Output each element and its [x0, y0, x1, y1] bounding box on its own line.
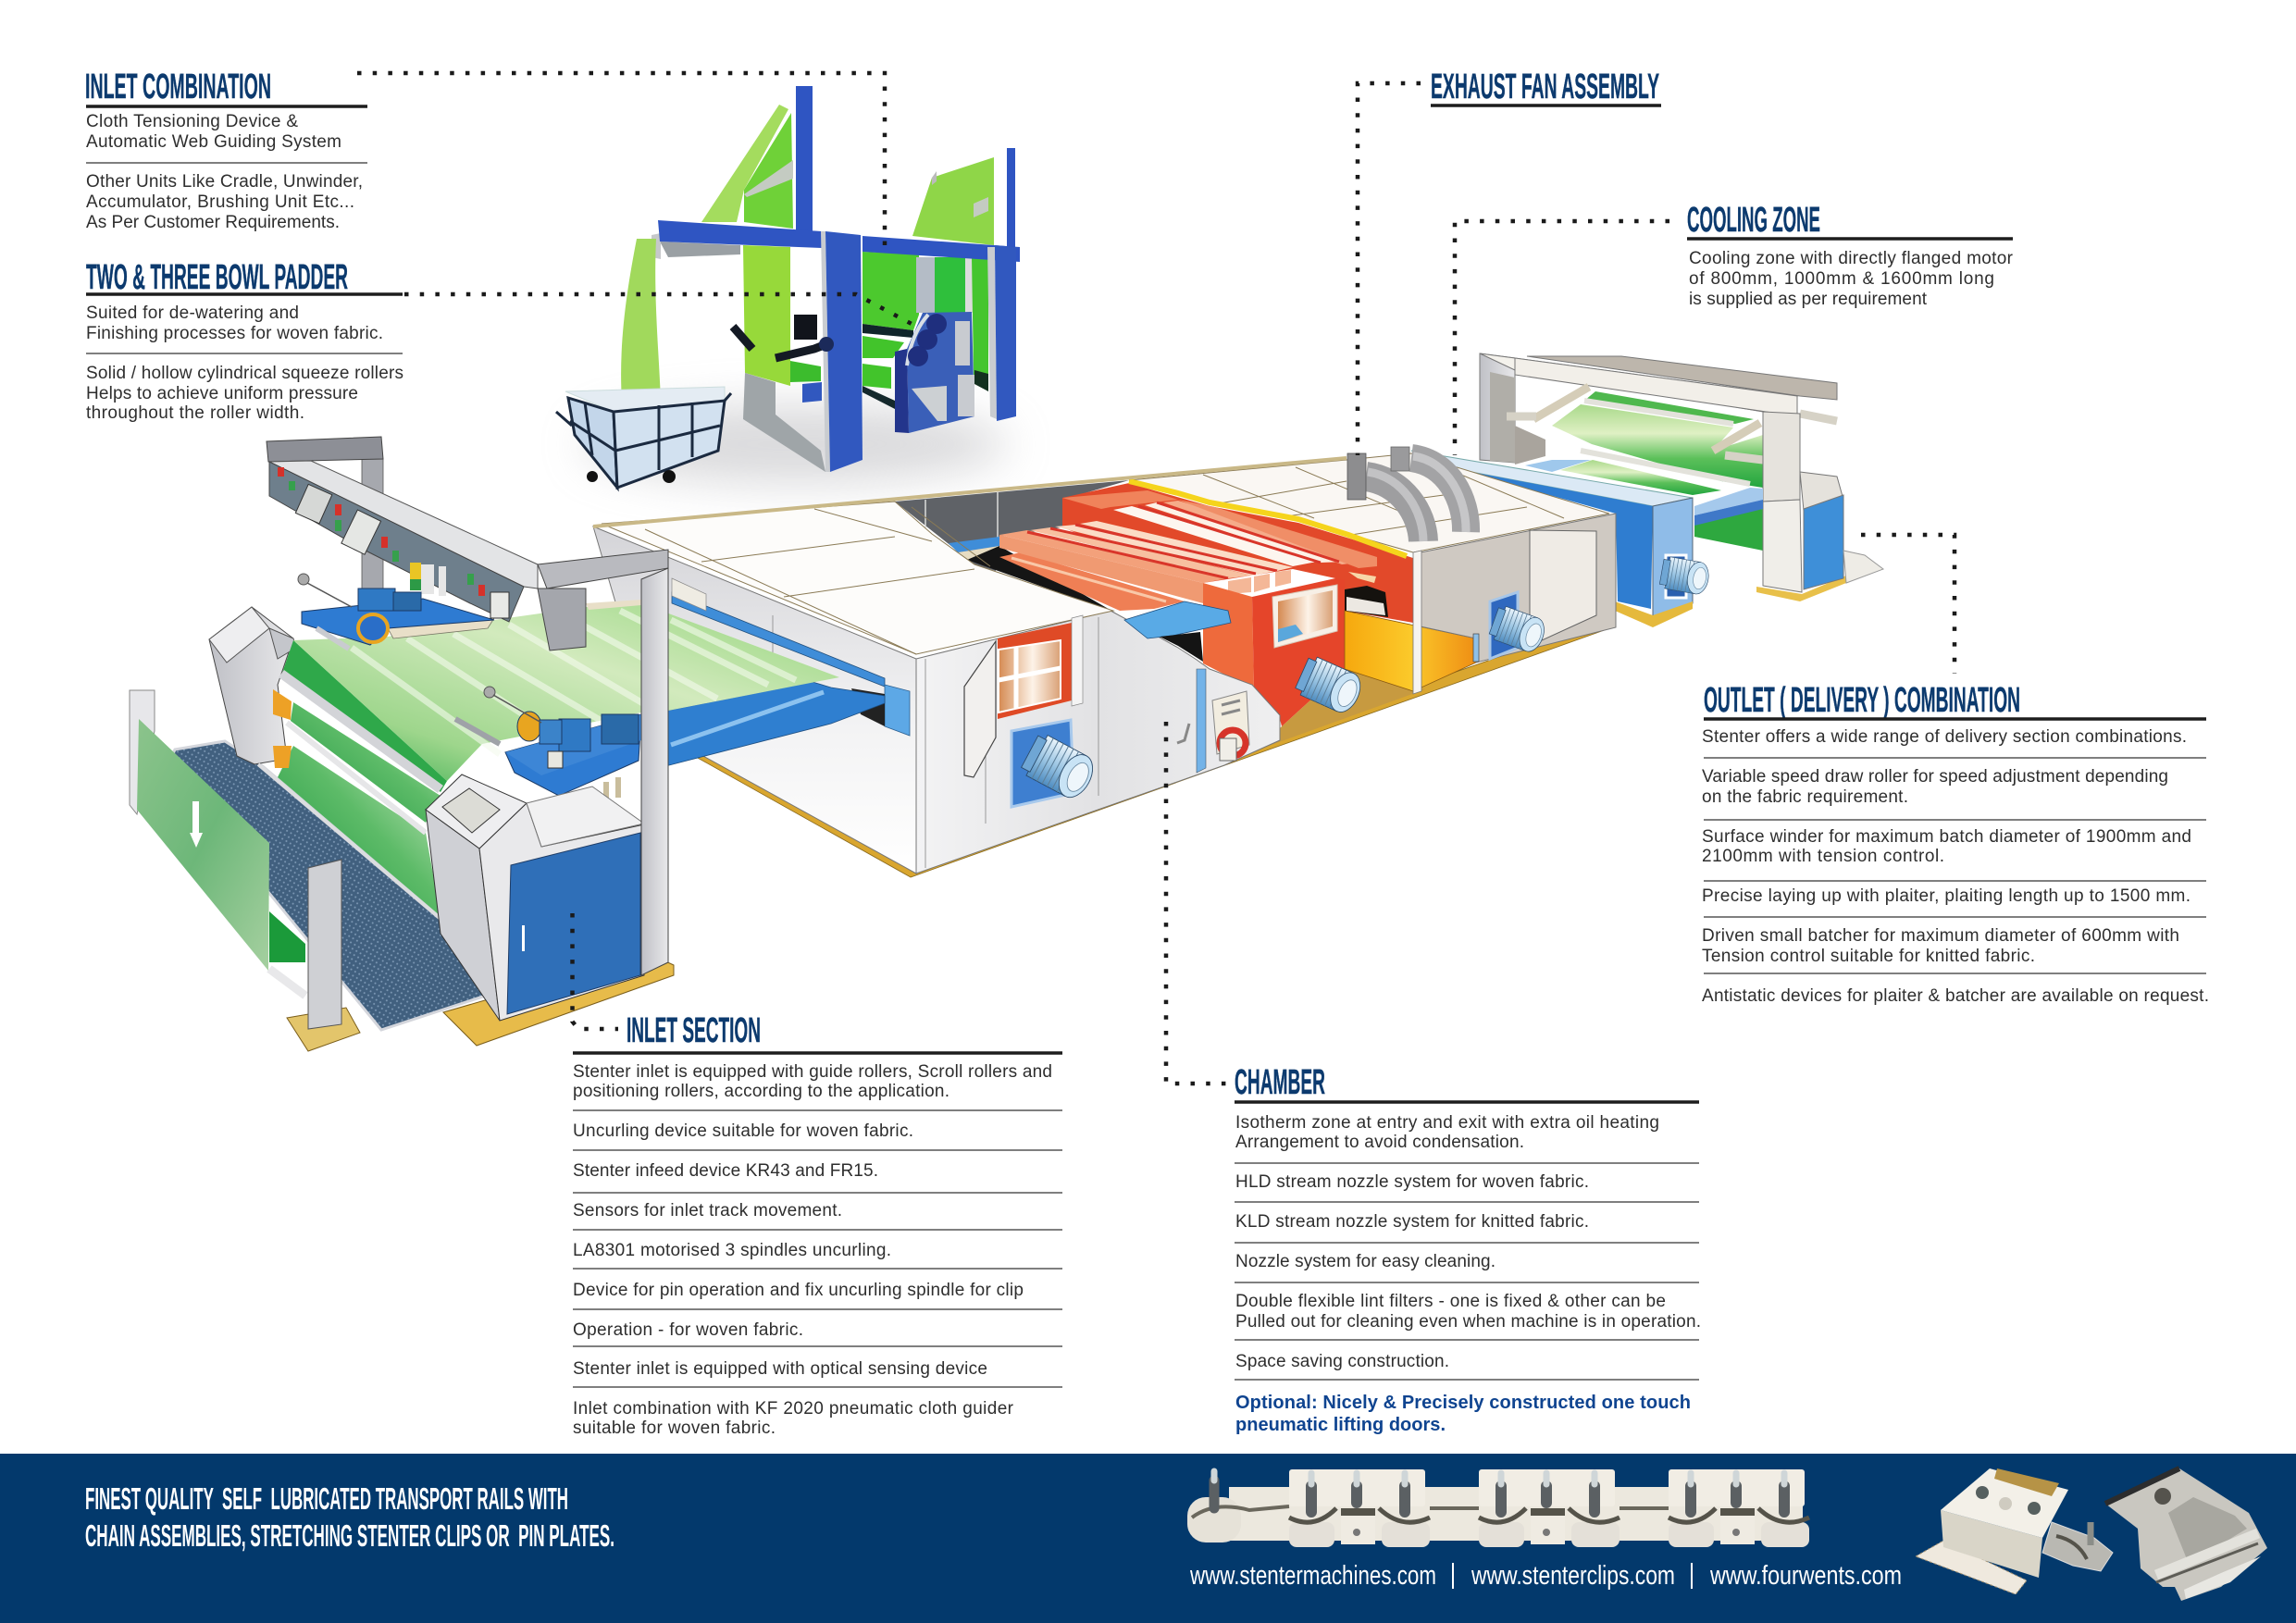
hanging cloth	[130, 690, 269, 971]
text block: cooling zone: is supplied as per requirement	[1689, 290, 1928, 309]
item: sensors: Sensors for inlet track movement.	[573, 1201, 842, 1220]
text block: squeeze rollers: throughout the roller width.	[86, 403, 304, 423]
item: antistatic: Antistatic devices for plaiter & batcher are available on request.	[1702, 986, 2209, 1006]
item: surface winder: Surface winder for maximum batch diameter of 1900mm and	[1702, 827, 2191, 847]
red wall window	[1272, 585, 1337, 648]
chamber front wall	[916, 611, 1280, 873]
item: lint filters: Pulled out for cleaning even when machine is in operation.	[1235, 1312, 1701, 1332]
outlet green fabric	[1552, 391, 1763, 551]
text block: other units	[86, 172, 363, 232]
green rollers	[258, 674, 441, 996]
text block: squeeze rollers: Helps to achieve uniform pressure	[86, 384, 358, 403]
footer headline	[85, 1481, 614, 1553]
nozzle end boxes	[1203, 569, 1335, 597]
item: isotherm	[1235, 1113, 1659, 1152]
red arch opening	[1345, 572, 1388, 617]
item: draw roller: on the fabric requirement.	[1702, 787, 1908, 807]
item: batcher	[1702, 926, 2179, 966]
panel: cooling zone	[1687, 201, 2014, 309]
front cabinet	[426, 774, 644, 1021]
chamber right roof	[1129, 453, 1609, 552]
item: guide rollers: positioning rollers, according to the application.	[573, 1082, 949, 1101]
panel: two and three bowl padder	[86, 258, 403, 423]
chamber right end wall	[1421, 514, 1616, 663]
icon: outlet duct motor	[1659, 556, 1711, 596]
item: KF 2020: Inlet combination with KF 2020 pneumatic cloth guider	[573, 1399, 1014, 1419]
divider	[573, 1345, 1062, 1347]
right end door	[1530, 530, 1596, 646]
footer headline: FINEST QUALITY SELF LUBRICATED TRANSPORT RAILS WITH	[85, 1481, 568, 1516]
footer headline: CHAIN ASSEMBLIES, STRETCHING STENTER CLIPS OR PIN PLATES.	[85, 1518, 614, 1553]
outlet blue duct	[1411, 451, 1763, 627]
padder front fabric	[743, 245, 790, 386]
icon: pin plate	[2105, 1468, 2267, 1601]
text block: other units: Other Units Like Cradle, Unwinder,	[86, 172, 363, 192]
opening shadow	[851, 688, 885, 726]
dotted leader: outlet combination	[1861, 535, 1955, 674]
dotted leader: chamber	[1166, 722, 1226, 1084]
item: range: Stenter offers a wide range of delivery section combinations.	[1702, 727, 2187, 747]
padder mid fabric and columns	[863, 252, 988, 409]
divider	[573, 1229, 1062, 1231]
divider	[573, 1192, 1062, 1194]
under-roll fabric	[281, 640, 447, 792]
footer background	[0, 1454, 2296, 1623]
heading: TWO & THREE BOWL PADDER	[86, 258, 348, 297]
item: KF 2020: suitable for woven fabric.	[573, 1419, 776, 1438]
divider	[573, 1386, 1062, 1388]
item: surface winder: 2100mm with tension control.	[1702, 847, 1944, 866]
footer band	[0, 1454, 2296, 1623]
service hatch	[1177, 669, 1249, 773]
item: isotherm: Isotherm zone at entry and exit with extra oil heating	[1235, 1113, 1659, 1133]
website links: www.stentermachines.com	[1189, 1561, 1436, 1591]
text block: other units: As Per Customer Requirements.	[86, 213, 340, 232]
item: lint filters: Double flexible lint filters - one is fixed & other can be	[1235, 1292, 1666, 1311]
panel: chamber	[1235, 1063, 1701, 1435]
door handle	[1473, 634, 1479, 662]
padder grey under frame	[652, 233, 825, 472]
chamber top slab	[1062, 490, 1178, 509]
website links: www.stenterclips.com	[1471, 1561, 1675, 1591]
inner blue duct	[1124, 601, 1231, 638]
item: operation: Operation - for woven fabric.	[573, 1320, 803, 1340]
heading rule	[86, 105, 367, 108]
item: KLD: KLD stream nozzle system for knitted fabric.	[1235, 1212, 1589, 1232]
illustration: padder machine with trolley	[556, 86, 1020, 488]
illustration: stenter chamber	[593, 447, 1616, 877]
dotted leader: inlet section	[572, 913, 618, 1029]
text block: other units: Accumulator, Brushing Unit Etc...	[86, 192, 354, 212]
chamber back grey wall	[895, 480, 1129, 571]
item: isotherm: Arrangement to avoid condensation.	[1235, 1133, 1524, 1152]
chamber floor	[1259, 669, 1425, 750]
item: draw roller	[1702, 767, 2168, 807]
rear cabinet	[209, 607, 296, 764]
text block: suited: Suited for de-watering and	[86, 304, 299, 323]
text block: cooling zone: Cooling zone with directly flanged motor	[1689, 249, 2014, 268]
item: KF 2020	[573, 1399, 1014, 1438]
chamber red back	[1062, 483, 1413, 623]
heading rule	[573, 1051, 1062, 1055]
divider	[1704, 819, 2206, 821]
front blue drive	[455, 687, 641, 801]
heading: INLET SECTION	[627, 1011, 761, 1050]
dotted leader: inlet combination	[357, 73, 885, 245]
divider	[1704, 973, 2206, 974]
item: optical sensing: Stenter inlet is equipped with optical sensing device	[573, 1359, 987, 1379]
text block: suited	[86, 304, 383, 343]
text block: tensioning: Cloth Tensioning Device &	[86, 112, 298, 131]
outlet frame	[1480, 353, 1883, 601]
chamber red front sections	[1203, 578, 1345, 726]
item: pin operation: Device for pin operation and fix uncurling spindle for clip	[573, 1281, 1024, 1300]
optional note	[1235, 1393, 1691, 1435]
website links	[1189, 1561, 1902, 1591]
dotted leader: cooling zone	[1455, 221, 1669, 455]
heading: INLET COMBINATION	[85, 68, 271, 106]
heading rule	[86, 292, 403, 296]
item: draw roller: Variable speed draw roller for speed adjustment depending	[1702, 767, 2168, 787]
item: space saving: Space saving construction.	[1235, 1352, 1449, 1371]
chamber gold floor strip	[696, 618, 1612, 877]
panel: outlet delivery combination	[1702, 681, 2209, 1006]
item: plaiter: Precise laying up with plaiter, plaiting length up to 1500 mm.	[1702, 886, 2191, 906]
panel: inlet section	[573, 1011, 1062, 1438]
padder drive hardware	[733, 315, 834, 358]
divider	[1235, 1201, 1699, 1203]
icon: stenter clip	[1916, 1468, 2113, 1594]
item: nozzle cleaning: Nozzle system for easy cleaning.	[1235, 1252, 1496, 1271]
optional note: Optional: Nicely & Precisely constructed one touch	[1235, 1393, 1691, 1413]
text block: squeeze rollers	[86, 364, 403, 423]
icon: red section motor	[1294, 654, 1366, 717]
inlet right pillar	[641, 568, 668, 975]
divider	[573, 1268, 1062, 1270]
divider	[1704, 880, 2206, 882]
item: guide rollers	[573, 1062, 1052, 1101]
interior blue strip	[949, 537, 999, 552]
divider	[1704, 757, 2206, 759]
upper nozzle bars	[1113, 500, 1377, 568]
dotted leader: two and three bowl padder	[404, 294, 912, 324]
text block: cooling zone	[1689, 249, 2014, 309]
illustration: inlet section	[130, 437, 839, 1051]
divider	[1704, 916, 2206, 918]
panel: cooling zone: COOLING ZONE	[1687, 201, 1820, 240]
divider	[1235, 1379, 1699, 1381]
heading: CHAMBER	[1235, 1063, 1325, 1102]
jamb	[885, 685, 910, 736]
illustration: outlet delivery combination	[1411, 353, 1883, 627]
divider	[573, 1149, 1062, 1151]
chamber left roof	[602, 502, 1113, 654]
corner band	[1413, 551, 1421, 694]
icon: right end fan motor	[1488, 592, 1548, 659]
item: guide rollers: Stenter inlet is equipped with guide rollers, Scroll rollers and	[573, 1062, 1052, 1082]
right roof grid	[1203, 467, 1564, 535]
front gold base	[443, 953, 674, 1046]
text block: suited: Finishing processes for woven fabric.	[86, 324, 383, 343]
text block: tensioning: Automatic Web Guiding System	[86, 132, 341, 152]
item: LA8301: LA8301 motorised 3 spindles uncurling.	[573, 1241, 891, 1260]
text block: cooling zone: of 800mm, 1000mm & 1600mm long	[1689, 269, 1994, 289]
divider	[1235, 1339, 1699, 1341]
duct shadow	[1160, 632, 1203, 662]
rear blue drive	[298, 574, 494, 649]
item: surface winder	[1702, 827, 2191, 866]
heading rule	[1235, 1100, 1699, 1104]
roof grid	[645, 507, 990, 654]
divider	[1235, 1282, 1699, 1283]
item: lint filters	[1235, 1292, 1701, 1332]
blue rail back	[672, 592, 885, 687]
chamber window	[998, 615, 1083, 719]
heading rule	[1431, 104, 1661, 107]
roof back edge	[593, 458, 1347, 527]
divider	[573, 1308, 1062, 1310]
chamber yellow door	[1345, 611, 1476, 691]
control panel displays	[278, 467, 509, 618]
item divider	[86, 162, 367, 164]
website links: www.fourwents.com	[1709, 1561, 1902, 1591]
optional note: pneumatic lifting doors.	[1235, 1415, 1446, 1435]
heading rule	[1704, 717, 2206, 721]
item: batcher: Tension control suitable for knitted fabric.	[1702, 947, 2035, 966]
divider	[573, 1109, 1062, 1111]
panel: inlet combination	[85, 68, 367, 232]
padder hanging fabric	[621, 239, 661, 402]
icon: transport chain	[1187, 1469, 1809, 1547]
chamber left door	[964, 641, 996, 777]
padder tall rear posts	[796, 86, 1015, 250]
mesh floor plate	[167, 741, 497, 1030]
blue lower duct	[648, 682, 885, 768]
padder blue frame	[658, 220, 1020, 472]
icon: chamber fan motor	[1011, 720, 1099, 807]
front post and base	[287, 860, 360, 1051]
green fabric bed	[293, 603, 839, 781]
chamber left wall	[593, 527, 916, 873]
inlet ruler label	[672, 578, 706, 611]
divider	[1235, 1162, 1699, 1164]
dotted leader: exhaust fan assembly	[1358, 83, 1421, 455]
padder upper fabric	[701, 105, 994, 245]
padder floor shadow	[583, 405, 1009, 483]
lower nozzle bars	[999, 521, 1293, 611]
heading: EXHAUST FAN ASSEMBLY	[1431, 68, 1659, 106]
item: batcher: Driven small batcher for maximum diameter of 600mm with	[1702, 926, 2179, 946]
inlet back post	[362, 459, 383, 596]
item: infeed: Stenter infeed device KR43 and FR15.	[573, 1161, 878, 1181]
top control beam	[267, 437, 668, 650]
text block: tensioning	[86, 112, 341, 152]
fabric trolley	[556, 387, 731, 488]
padder side plate	[895, 312, 974, 433]
item: uncurling: Uncurling device suitable for woven fabric.	[573, 1121, 913, 1141]
chain rails	[388, 600, 641, 638]
heading rule	[1687, 237, 2013, 241]
divider	[1235, 1242, 1699, 1244]
exhaust pipes	[1347, 447, 1466, 541]
interior beige chain	[958, 546, 999, 562]
wall panel joints	[773, 615, 1098, 868]
text block: squeeze rollers: Solid / hollow cylindrical squeeze rollers	[86, 364, 403, 383]
item divider	[86, 353, 403, 354]
item: HLD: HLD stream nozzle system for woven fabric.	[1235, 1172, 1589, 1192]
yellow roof edge	[1129, 481, 1407, 556]
interior dark shadow	[967, 546, 1124, 618]
